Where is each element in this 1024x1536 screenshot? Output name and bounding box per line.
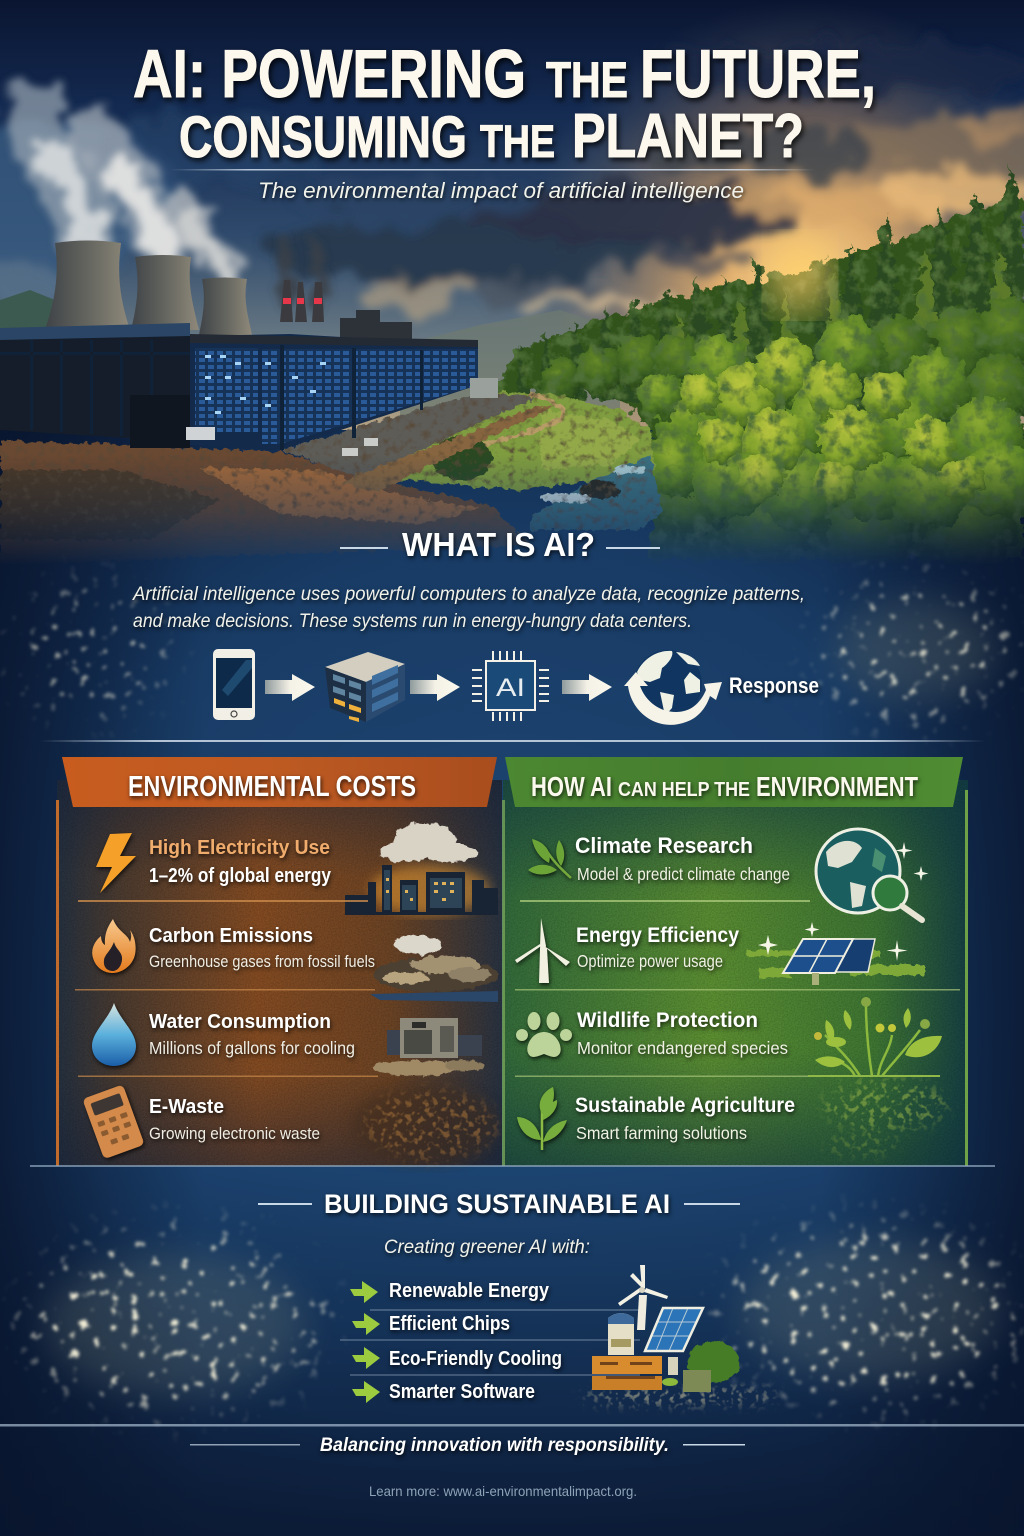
banner: how AI can help: ENVIRONMENT <box>756 771 918 802</box>
sparkle star field <box>0 554 1024 1438</box>
item: energy efficiency: Energy Efficiency <box>576 923 739 947</box>
checklist <box>340 1280 640 1403</box>
meadow and stream <box>380 392 662 530</box>
item: e-waste: Growing electronic waste <box>149 1124 320 1143</box>
illustration: smog and debris <box>370 935 498 1002</box>
list item: renewable energy: Renewable Energy <box>389 1280 550 1302</box>
icon: leaves <box>528 839 571 878</box>
banner: environmental costs <box>62 757 497 807</box>
intro text: and make decisions. These systems run in energy-hungry data centers. <box>133 610 692 632</box>
item: water consumption <box>92 1003 355 1066</box>
banner: environmental costs: ENVIRONMENTAL COSTS <box>128 771 416 803</box>
illustration: young plants <box>808 997 942 1076</box>
item: climate research: Model & predict climate change <box>577 864 790 884</box>
title: CONSUMING <box>179 105 467 170</box>
panel background <box>56 780 502 1166</box>
distant hills <box>0 290 620 420</box>
icon: flame <box>92 919 136 973</box>
illustration: solar panel <box>745 922 925 985</box>
eroded brown earth <box>0 392 552 565</box>
intro text <box>132 583 805 632</box>
icon: smartphone <box>213 649 255 720</box>
list item: eco-friendly cooling <box>352 1347 562 1370</box>
title rule <box>170 169 815 170</box>
arrow <box>410 674 460 701</box>
smoke plumes <box>30 110 320 300</box>
closing tagline: Balancing innovation with responsibility. <box>320 1435 669 1456</box>
item: high electricity use: High Electricity Use <box>149 836 330 859</box>
item: high electricity use <box>96 833 332 893</box>
icon: server rack <box>325 652 405 722</box>
item: sustainable agriculture <box>517 1087 795 1150</box>
forest <box>490 165 1024 579</box>
list item: efficient chips <box>352 1313 510 1335</box>
illustration: fertile soil <box>822 1079 947 1154</box>
item: energy efficiency <box>515 918 739 983</box>
row dividers <box>75 900 378 1077</box>
item: carbon emissions: Carbon Emissions <box>149 924 313 947</box>
title: PLANET? <box>572 102 804 171</box>
item: wildlife protection <box>516 1008 788 1058</box>
icon: AI chip: AI <box>496 674 525 702</box>
item: wildlife protection: Wildlife Protection <box>577 1008 758 1032</box>
title: THE <box>546 52 628 108</box>
smokestacks <box>280 280 412 345</box>
title: THE <box>480 116 555 167</box>
item: carbon emissions <box>92 919 375 973</box>
subtitle: The environmental impact of artificial intelligence <box>258 178 744 203</box>
arrow <box>562 674 612 701</box>
icon: globe with circular arrows <box>624 650 722 725</box>
heading: what is AI: WHAT IS AI? <box>402 526 595 563</box>
banner: how AI can help <box>505 757 963 807</box>
icon: paw print <box>516 1012 572 1057</box>
banner: how AI can help: HOW AI <box>531 771 612 802</box>
icon: lightning bolt <box>96 833 136 893</box>
data center building <box>0 323 498 456</box>
process flow <box>213 649 819 725</box>
footer link: Learn more: www.ai-environmentalimpact.org. <box>369 1483 637 1499</box>
panel background <box>502 780 968 1166</box>
item: e-waste <box>82 1084 320 1159</box>
panel: how AI can help <box>502 757 968 1166</box>
title: FUTURE, <box>640 36 876 112</box>
panel: environmental costs <box>56 757 502 1166</box>
title <box>133 36 876 171</box>
row dividers <box>515 900 960 1077</box>
illustration: globe under magnifier <box>816 829 928 920</box>
icon: AI chip <box>472 651 549 721</box>
list item: efficient chips: Efficient Chips <box>389 1313 510 1335</box>
item: energy efficiency: Optimize power usage <box>577 951 723 971</box>
cooling towers <box>45 240 252 335</box>
item: e-waste: E-Waste <box>149 1095 224 1118</box>
illustration: waste heap <box>351 1085 499 1165</box>
list item: smarter software: Smarter Software <box>389 1381 535 1403</box>
illustration: green energy stack <box>580 1265 780 1402</box>
icon: wind turbine <box>515 918 570 983</box>
item: wildlife protection: Monitor endangered species <box>577 1038 788 1058</box>
illustration: cooling unit on rubble <box>373 1018 485 1076</box>
item: high electricity use: 1–2% of global energy <box>149 865 332 887</box>
illustration: polluted city <box>345 823 498 915</box>
intro text: Artificial intelligence uses powerful computers to analyze data, recognize patterns, <box>132 583 805 605</box>
item: sustainable agriculture: Smart farming solutions <box>576 1123 747 1143</box>
heading: building sustainable AI: BUILDING SUSTAINABLE AI <box>324 1189 670 1219</box>
item: climate research <box>528 833 790 884</box>
item: climate research: Climate Research <box>575 833 753 858</box>
item: water consumption: Millions of gallons for cooling <box>149 1038 355 1058</box>
banner: how AI can help: CAN HELP THE <box>618 779 750 801</box>
intro line: Creating greener AI with: <box>384 1236 590 1258</box>
clouds <box>0 44 1024 312</box>
arrow <box>265 674 315 701</box>
icon: seedling <box>517 1087 567 1150</box>
sky <box>0 0 1024 430</box>
divider <box>30 1165 995 1167</box>
item: water consumption: Water Consumption <box>149 1010 331 1033</box>
icon: broken device <box>82 1084 145 1159</box>
divider <box>0 1424 1024 1426</box>
hero landscape illustration <box>0 0 1024 579</box>
title: AI: POWERING <box>133 36 526 112</box>
list item: eco-friendly cooling: Eco-Friendly Cooling <box>389 1348 562 1370</box>
divider <box>40 740 985 742</box>
icon: water drop <box>92 1003 136 1066</box>
item: carbon emissions: Greenhouse gases from fossil fuels <box>149 952 375 971</box>
item: sustainable agriculture: Sustainable Agriculture <box>575 1093 795 1117</box>
sun glow <box>768 237 832 313</box>
label: response: Response <box>729 673 819 698</box>
